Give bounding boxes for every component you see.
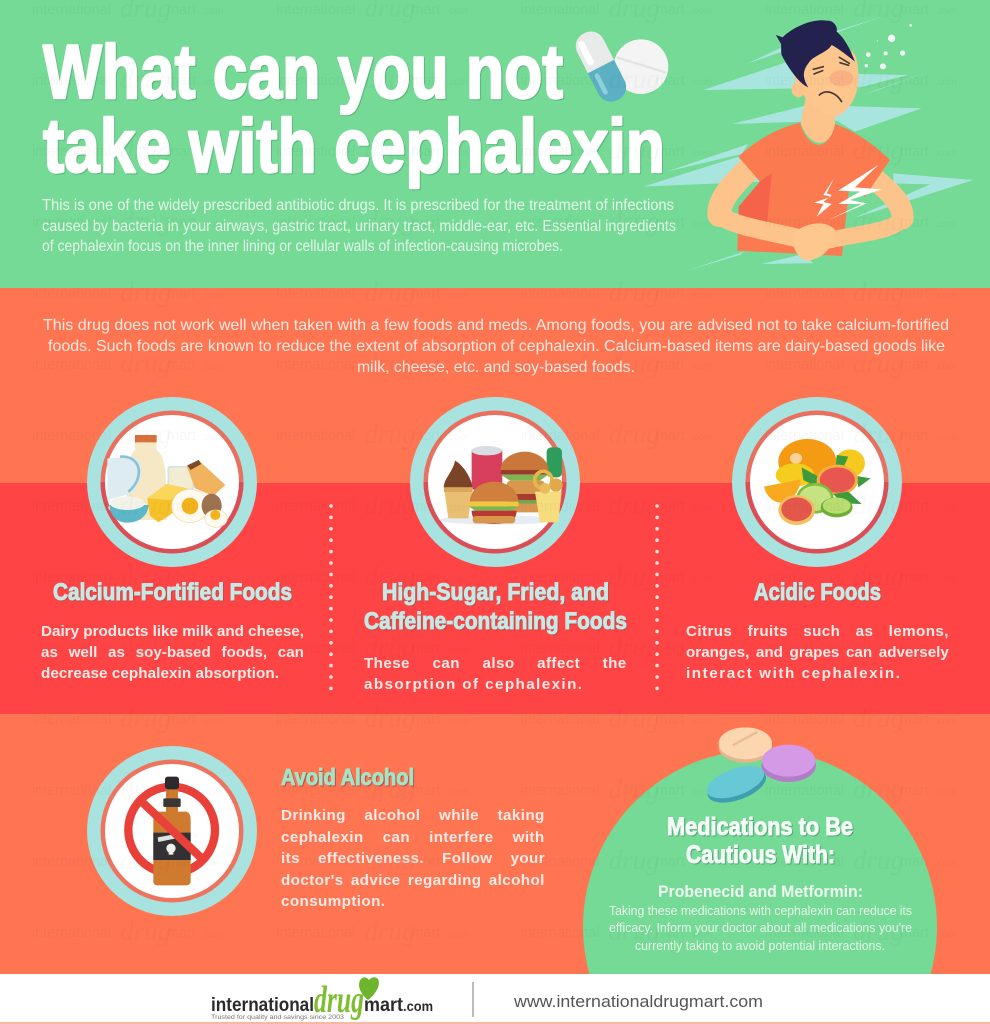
text: avoid alcohol detail: consumption. — [281, 893, 385, 910]
divider: right dotted line — [655, 504, 659, 690]
text: acidic foods detail: Citrus fruits such as lemons, — [686, 623, 949, 640]
illustration: man with stomach ache — [643, 15, 973, 271]
icon: fast food circle — [410, 397, 580, 567]
icon: citrus fruit circle — [732, 397, 902, 567]
panel: footer — [0, 974, 990, 1024]
text: high-sugar foods detail: absorption of cephalexin. — [364, 676, 582, 693]
paragraph: foods and meds overview: This drug does not work well when taken with a few foods and meds. Among foods, you are advised not to take calcium-fortified — [43, 317, 949, 334]
lightning bolts — [814, 165, 882, 220]
intro text: of cephalexin focus on the inner lining or cellular walls of infection-causing microbes. — [42, 238, 563, 255]
website url: www.internationaldrugmart.com — [513, 993, 763, 1011]
heading: calcium-fortified foods: Calcium-Fortified Foods — [53, 579, 292, 606]
paragraph: foods and meds overview: milk, cheese, etc. and soy-based foods. — [357, 359, 635, 376]
subheading: probenecid and metformin: Probenecid and Metformin: — [658, 882, 863, 901]
panel: green header background — [0, 0, 990, 288]
text: avoid alcohol detail: its effectiveness. Follow your — [281, 850, 545, 867]
icon: capsule and tablet — [571, 27, 668, 107]
title: What can you not — [43, 30, 563, 115]
intro text: caused by bacteria in your airways, gastric tract, urinary tract, middle-ear, etc. Essential ingredients — [42, 218, 676, 235]
logo: drug — [314, 979, 364, 1021]
logo: mart — [364, 995, 404, 1016]
text: acidic foods detail: oranges, and grapes can adversely — [686, 644, 949, 661]
text: acidic foods detail: interact with cephalexin. — [686, 665, 900, 682]
panel: medications green semicircle — [583, 750, 937, 974]
sneeze dots — [865, 24, 912, 69]
intro text — [42, 197, 676, 255]
fist — [792, 223, 835, 261]
text: high-sugar foods detail: These can also affect the — [364, 655, 627, 672]
icon: no alcohol circle — [87, 746, 257, 916]
paragraph: foods and meds overview: foods. Such foods are known to reduce the extent of absorption of cephalexin. Calcium-based items are dairy-based goods like — [48, 338, 945, 355]
title: take with cephalexin — [43, 104, 665, 189]
text: avoid alcohol detail: Drinking alcohol while taking — [281, 807, 545, 824]
text: avoid alcohol detail: cephalexin can interfere with — [281, 829, 545, 846]
text: medications detail: Taking these medications with cephalexin can reduce its — [609, 903, 912, 918]
speed streaks — [643, 15, 973, 271]
panel: orange lower background — [0, 714, 990, 974]
heading: high-sugar, fried and caffeine foods — [364, 579, 627, 635]
heading: medications to be cautious with: Medications to Be — [667, 813, 853, 841]
intro text: This is one of the widely prescribed antibiotic drugs. It is prescribed for the treatment of infections — [42, 197, 674, 214]
logo: .com — [403, 998, 433, 1014]
torso shirt — [737, 123, 890, 256]
text: calcium-fortified foods detail — [41, 623, 304, 682]
icon: dairy foods circle — [87, 397, 257, 567]
forearms — [719, 215, 903, 241]
paragraph: foods and meds overview — [43, 317, 949, 376]
heading: medications to be cautious with: Cautious With: — [686, 841, 835, 869]
text: medications detail — [609, 903, 912, 953]
divider: left dotted line — [329, 504, 333, 690]
text: calcium-fortified foods detail: Dairy products like milk and cheese, — [41, 623, 304, 640]
neck — [801, 97, 835, 143]
text: calcium-fortified foods detail: as well as soy-based foods, can — [41, 644, 304, 661]
text: avoid alcohol detail — [281, 807, 545, 910]
heading: high-sugar, fried and caffeine foods: Caffeine-containing Foods — [364, 608, 627, 635]
text: medications detail: currently taking to avoid potential interactions. — [635, 938, 885, 953]
heading: high-sugar, fried and caffeine foods: High-Sugar, Fried, and — [382, 579, 609, 606]
text: acidic foods detail — [686, 623, 949, 682]
heading: acidic foods: Acidic Foods — [754, 579, 881, 606]
logo: international — [211, 995, 314, 1016]
title — [43, 30, 665, 189]
upper arms — [719, 167, 903, 218]
text: medications detail: efficacy. Inform your doctor about all medications you're — [609, 920, 912, 935]
heading: avoid alcohol: Avoid Alcohol — [281, 764, 414, 790]
icon: three pills — [702, 727, 816, 809]
text: high-sugar foods detail — [364, 655, 627, 693]
heading: medications to be cautious with — [667, 813, 853, 869]
panel: red band background — [0, 483, 990, 714]
text: calcium-fortified foods detail: decrease cephalexin absorption. — [41, 665, 279, 682]
face lines — [813, 57, 849, 102]
logo: Trusted for quality and savings since 2003 — [211, 1014, 344, 1021]
head — [793, 43, 858, 116]
hair — [776, 20, 855, 87]
panel: orange upper background — [0, 288, 990, 483]
logo — [211, 977, 433, 1021]
text: avoid alcohol detail: doctor's advice regarding alcohol — [281, 872, 545, 889]
